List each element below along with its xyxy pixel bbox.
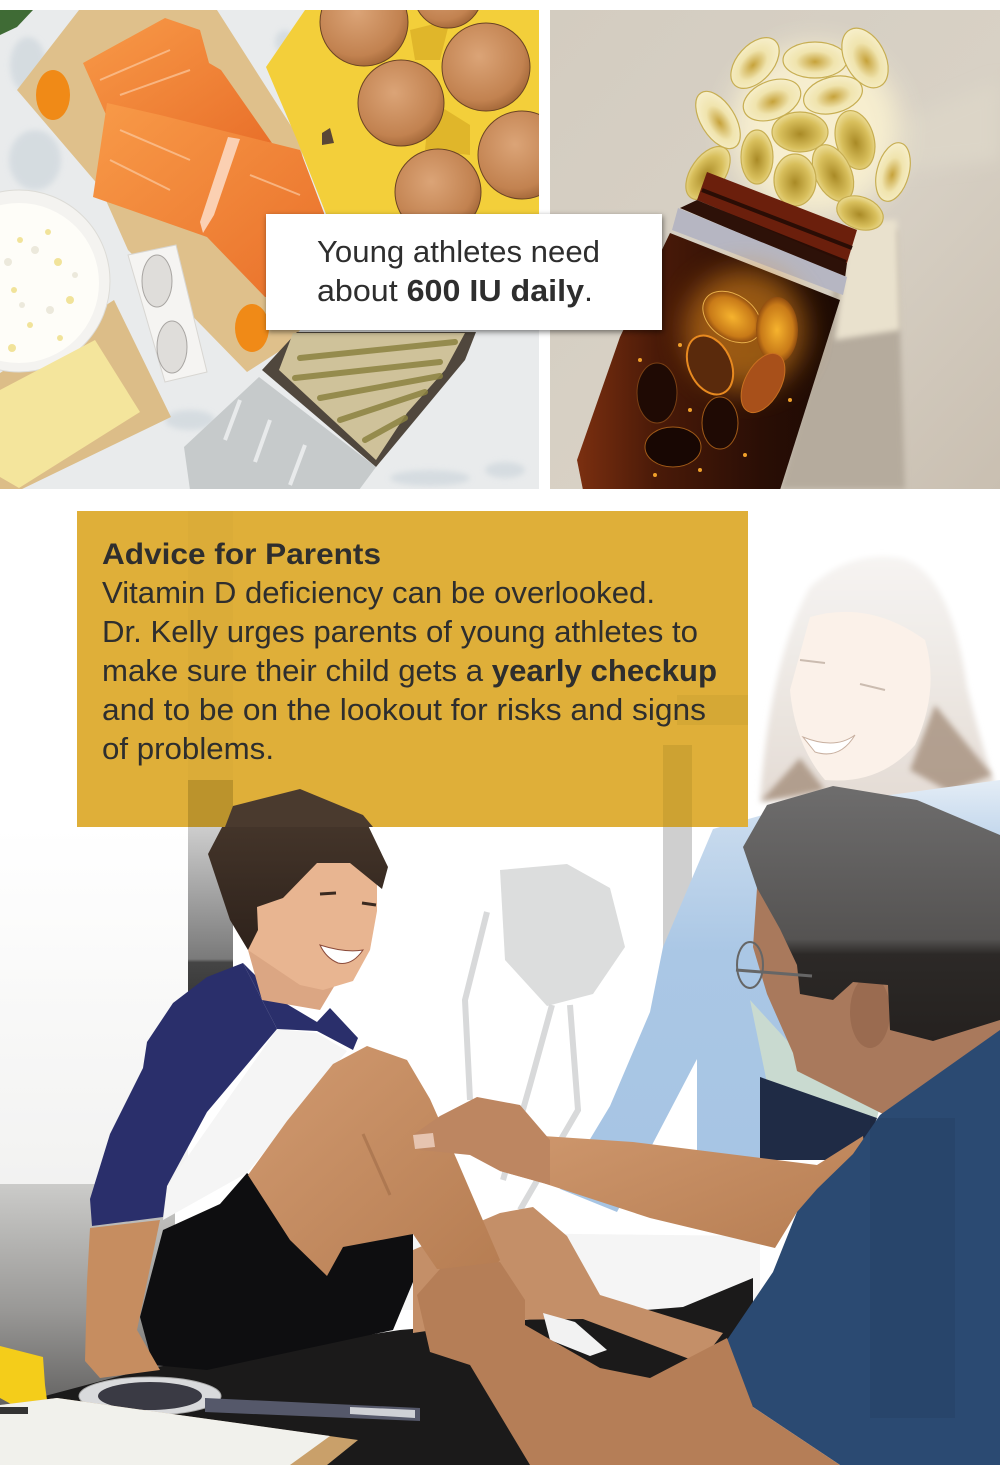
- callout text: about 600 IU daily.: [317, 273, 593, 308]
- boy: [85, 789, 723, 1378]
- bent leg: [248, 1046, 500, 1276]
- bowl of cottage cheese: [0, 190, 110, 372]
- body text: [102, 575, 717, 766]
- boy's hair overlapping panel: [225, 789, 373, 827]
- body text: Vitamin D deficiency can be overlooked.: [102, 575, 655, 610]
- body text: of problems.: [102, 731, 274, 766]
- woman smiling: [560, 557, 1000, 1212]
- photo: vitamin D capsules and jar: [550, 10, 1000, 490]
- glass jar: [577, 172, 857, 490]
- doctor's hands and lower arm: [413, 1097, 840, 1465]
- egg carton: [266, 10, 539, 214]
- man's upper arm and shirt: [500, 1030, 1000, 1465]
- orange peppers: [36, 70, 70, 120]
- parchment: [0, 300, 171, 490]
- floor and table: [0, 1184, 760, 1465]
- leaf: [0, 10, 33, 35]
- room pillars: [188, 827, 692, 992]
- supporting arm: [85, 1220, 160, 1378]
- exercise machine: [465, 864, 625, 1210]
- callout text: Young athletes need: [317, 234, 600, 269]
- amber capsules in jar: [637, 281, 798, 477]
- man's head: [736, 786, 1000, 1114]
- sleeve: [90, 963, 277, 1226]
- torso: [163, 1029, 347, 1220]
- callout: daily IU: [266, 214, 662, 330]
- body text: and to be on the lookout for risks and signs: [102, 692, 706, 727]
- panel: advice for parents: [77, 511, 748, 827]
- eggs: [320, 10, 539, 214]
- shorts: [140, 1173, 413, 1370]
- callout text: [317, 234, 600, 308]
- sardine tin: [184, 332, 476, 490]
- far leg: [413, 1207, 723, 1363]
- body text: make sure their child gets a yearly checkup: [102, 653, 717, 688]
- neck and face: [248, 950, 335, 1010]
- cutting board: [17, 10, 325, 372]
- goniometer: [79, 1377, 420, 1421]
- denim shirt: [560, 780, 1000, 1212]
- salmon fillets: [83, 18, 272, 143]
- capsule blister pack: [128, 245, 207, 382]
- body text: Dr. Kelly urges parents of young athletes to: [102, 614, 698, 649]
- yellow block: [0, 1346, 47, 1409]
- butter: [0, 340, 140, 488]
- clipboard: [0, 1398, 358, 1465]
- photo: doctor examining boy's knee: [0, 490, 1000, 1465]
- photo: vitamin D rich foods: [0, 0, 566, 490]
- capsules spilling: [685, 28, 911, 231]
- glasses: [736, 942, 812, 988]
- hair: [208, 827, 388, 950]
- heading: Advice for Parents: [102, 538, 381, 571]
